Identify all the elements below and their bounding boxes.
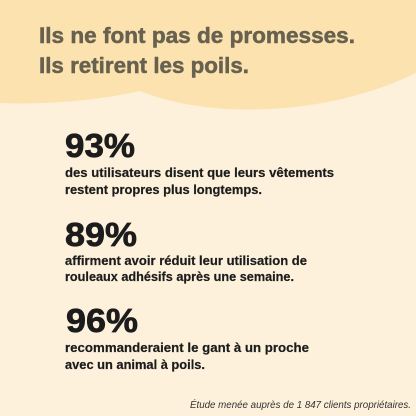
stat: 93% xyxy=(65,127,334,197)
stat: 93%: des utilisateurs disent que leurs vêtements xyxy=(65,166,334,180)
title: Ils retirent les poils. xyxy=(39,53,249,78)
stat: 96%: recommanderaient le gant à un proche xyxy=(65,341,309,355)
title xyxy=(39,23,355,78)
stat: 89%: 89% xyxy=(65,216,137,253)
header wave xyxy=(0,0,416,110)
title: Ils ne font pas de promesses. xyxy=(39,23,355,48)
stat: 96% xyxy=(65,302,309,372)
stat: 96%: 96% xyxy=(66,302,138,339)
stat: 96%: avec un animal à poils. xyxy=(65,358,205,372)
stat: 89%: affirment avoir réduit leur utilisation de xyxy=(65,254,307,268)
stat: 89% xyxy=(65,216,307,284)
stat: 93%: 93% xyxy=(65,127,135,164)
stat: 93%: restent propres plus longtemps. xyxy=(65,183,262,197)
stat: 89%: rouleaux adhésifs après une semaine. xyxy=(65,270,294,284)
